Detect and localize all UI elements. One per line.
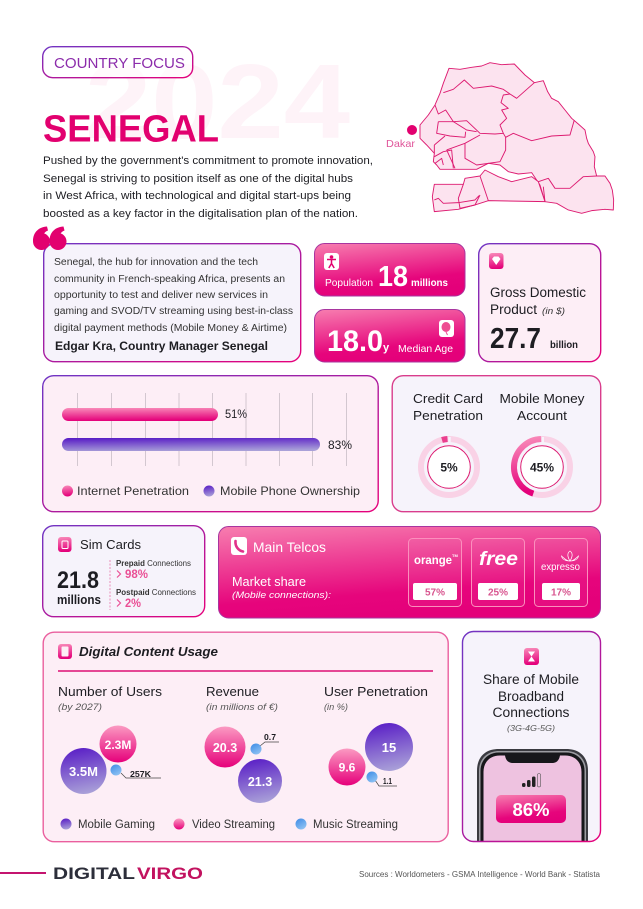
telco: orange: orange — [414, 553, 452, 567]
panel: sim cards — [43, 526, 205, 617]
bubbles: user penetration: 1.1 — [383, 776, 392, 786]
quote text: gaming and SVOD/TV streaming using best-in-class — [54, 306, 293, 317]
column heading: user penetration: User Penetration — [324, 684, 428, 699]
column heading: number of users: Number of Users — [58, 684, 163, 699]
telco: expresso — [534, 538, 588, 606]
legend: bars: Internet Penetration — [77, 484, 189, 498]
column heading: user penetration — [324, 684, 428, 712]
broadband heading: Share of Mobile — [483, 672, 579, 687]
bubbles: number of users: 257K — [130, 769, 152, 779]
GDP label: (in $) — [542, 306, 565, 317]
legend: content types — [60, 818, 398, 831]
donut: credit card 5%: 5% — [440, 460, 458, 474]
prepaid connections: 98% — [125, 567, 148, 581]
icon: hourglass — [524, 648, 539, 665]
bubbles: revenue: 20.3 — [213, 741, 237, 755]
quote text: community in French-speaking Africa, presents an — [54, 274, 285, 285]
map of Senegal — [386, 63, 614, 213]
signal bars — [522, 774, 540, 787]
telco: free — [472, 538, 524, 606]
donut: credit card 5% — [421, 437, 477, 495]
telco: expresso: expresso — [541, 561, 580, 573]
legend: bars — [62, 484, 360, 498]
bubbles: number of users: 3.5M — [69, 764, 98, 779]
quote text — [54, 257, 293, 334]
intro text: Pushed by the government's commitment to promote innovation, — [43, 155, 373, 167]
quote text: Senegal, the hub for innovation and the tech — [54, 257, 258, 268]
icon: balloon — [439, 320, 454, 337]
icon: phone handset — [231, 537, 247, 555]
intro text — [43, 155, 373, 220]
icon: sim — [58, 537, 72, 552]
population label: Population — [325, 277, 373, 289]
heading: credit card penetration — [413, 391, 483, 423]
digital content heading: Digital Content Usage — [79, 644, 218, 659]
bubbles: number of users — [60, 726, 161, 794]
median age label: Median Age — [398, 343, 453, 355]
prepaid connections: Prepaid Connections — [116, 559, 191, 568]
broadband heading: (3G-4G-5G) — [507, 724, 555, 733]
telco: free: free — [479, 549, 518, 570]
panel: mobile broadband share — [462, 632, 600, 842]
market share label: Market share — [232, 575, 306, 589]
legend: bars: Mobile Phone Ownership — [220, 484, 360, 498]
broadband heading: Connections — [492, 705, 570, 720]
panel: quote — [44, 244, 301, 362]
sim cards heading: Sim Cards — [80, 537, 141, 552]
panel: internet and mobile bar chart — [43, 376, 378, 512]
donut: mobile money 45% — [514, 437, 570, 495]
legend: content types: Music Streaming — [313, 819, 398, 831]
column heading: revenue: (in millions of €) — [206, 702, 278, 712]
bubbles: user penetration: 9.6 — [339, 760, 356, 774]
value 83%: 83% — [328, 440, 352, 452]
sim cards value: 21.8 — [57, 567, 99, 594]
footer logo — [0, 864, 203, 883]
population unit: millions — [411, 277, 448, 289]
telco: expresso: 17% — [551, 588, 571, 598]
column heading: number of users — [58, 684, 163, 712]
donut: mobile money 45%: 45% — [530, 460, 554, 474]
quote text: opportunity to test and deliver new services in — [54, 290, 268, 301]
prepaid connections — [116, 559, 191, 581]
bubbles: user penetration — [328, 723, 413, 786]
column heading: revenue — [206, 684, 278, 712]
bar: internet penetration — [62, 408, 247, 421]
broadband heading: Broadband — [498, 689, 564, 704]
postpaid connections — [116, 588, 196, 610]
panel: credit card and mobile money — [392, 376, 601, 512]
GDP label: Product — [490, 302, 537, 317]
intro text: Senegal is striving to position itself as one of the digital hubs — [43, 173, 353, 185]
watermark year: 2024 — [85, 43, 350, 161]
heading: credit card penetration: Penetration — [413, 408, 483, 423]
icon: quotation marks — [33, 226, 66, 250]
sim cards unit: millions — [57, 593, 101, 607]
telco: free: 25% — [488, 588, 508, 598]
heading: mobile money account — [500, 391, 585, 423]
market share label: (Mobile connections): — [232, 590, 331, 601]
panel: GDP — [479, 244, 601, 362]
legend: content types: Video Streaming — [192, 819, 275, 831]
panel: population — [314, 244, 465, 296]
bubbles: revenue: 21.3 — [248, 775, 272, 789]
heading: mobile money account: Mobile Money — [500, 391, 585, 406]
GDP label: Gross Domestic — [490, 285, 586, 300]
bar: mobile phone ownership — [62, 438, 352, 452]
GDP label — [490, 285, 586, 317]
Dakar label: Dakar — [386, 138, 416, 150]
heading: credit card penetration: Credit Card — [413, 391, 483, 406]
phone illustration — [477, 749, 588, 841]
main telcos heading: Main Telcos — [253, 540, 326, 555]
panel: digital content usage — [43, 632, 448, 842]
panel: main telcos — [218, 526, 600, 618]
heading: mobile money account: Account — [517, 408, 567, 423]
intro text: boosted as a key factor in the digitalisation plan of the nation. — [43, 208, 358, 220]
value 86%: 86% — [512, 799, 550, 820]
country focus tag — [43, 47, 193, 78]
postpaid connections: Postpaid Connections — [116, 588, 196, 597]
population value: 18 — [378, 261, 408, 293]
postpaid connections: 2% — [125, 596, 141, 610]
icon: person — [324, 253, 339, 270]
telco: orange: 57% — [425, 588, 445, 598]
Dakar marker — [407, 125, 417, 135]
bubbles: revenue: 0.7 — [264, 732, 276, 742]
country focus tag: COUNTRY FOCUS — [54, 56, 185, 72]
panel: median age — [314, 310, 465, 362]
GDP unit: billion — [550, 340, 578, 351]
broadband heading — [483, 672, 579, 733]
telco: orange — [408, 538, 462, 606]
bubbles: user penetration: 15 — [382, 740, 396, 755]
legend: content types: Mobile Gaming — [78, 819, 155, 831]
icon: diamond — [489, 253, 504, 269]
footer logo: DIGITAL — [53, 864, 135, 883]
footer logo: VIRGO — [137, 864, 203, 883]
quote text: digital payment methods (Mobile Money & Airtime) — [54, 323, 287, 334]
bubbles: number of users: 2.3M — [105, 738, 131, 752]
market share label — [232, 575, 331, 601]
GDP value: 27.7 — [490, 323, 541, 355]
column heading: number of users: (by 2027) — [58, 702, 102, 712]
value 51%: 51% — [225, 409, 247, 421]
column heading: user penetration: (in %) — [324, 702, 348, 712]
intro text: in West Africa, with technological and digital start-ups being — [43, 190, 351, 202]
title: SENEGAL — [43, 108, 219, 150]
quote author: Edgar Kra, Country Manager Senegal — [55, 339, 268, 353]
median age unit: y — [383, 342, 390, 354]
column heading: revenue: Revenue — [206, 684, 259, 699]
sources: Sources : Worldometers - GSMA Intelligence - World Bank - Statista — [359, 870, 601, 879]
bubbles: revenue — [204, 726, 282, 803]
median age value: 18.0 — [327, 325, 383, 358]
icon: mobile screen — [58, 644, 72, 659]
telco: orange: TM — [452, 553, 458, 558]
